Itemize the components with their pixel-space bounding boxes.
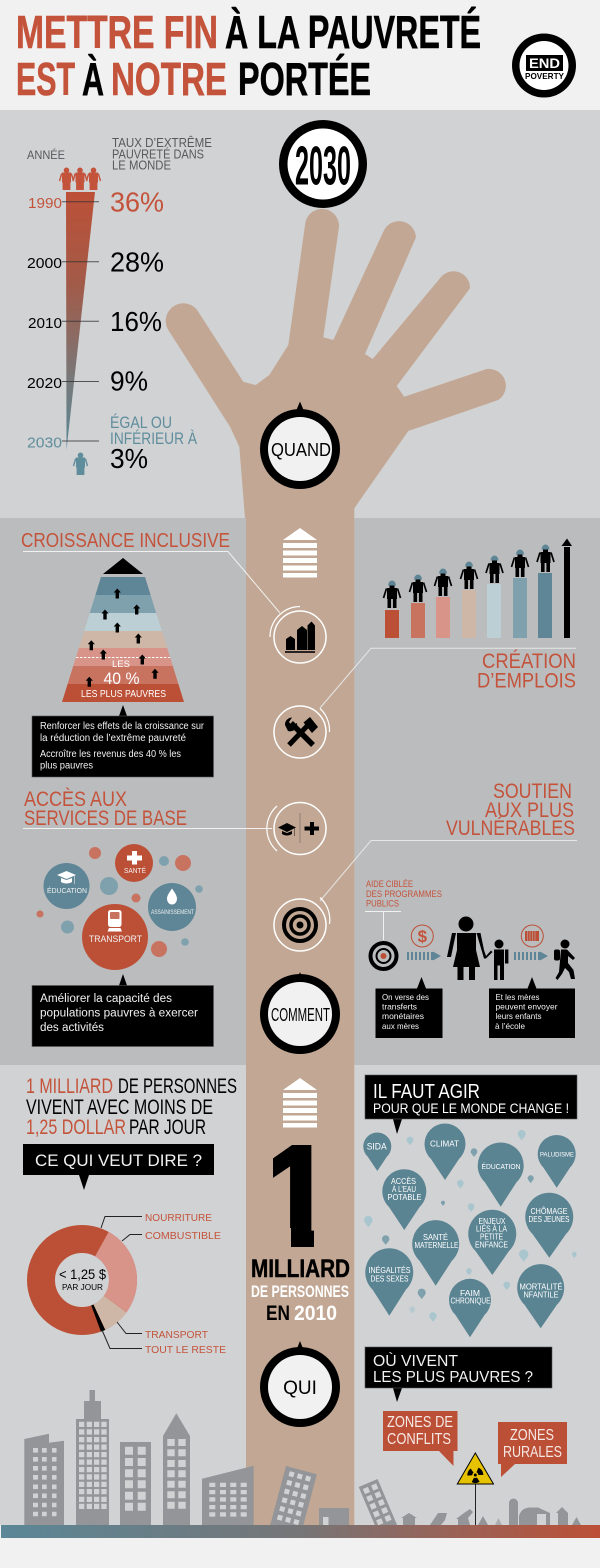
footer background [0,1538,600,1568]
leader line [23,552,280,613]
pin labels: PALUDISME [540,1152,575,1159]
callout: transfers: On verse des [382,992,429,1002]
column heading: rate [112,135,212,172]
icon: growth bars [270,606,326,663]
logo: end poverty: END [529,55,560,71]
callout [365,1347,552,1402]
heading [477,650,576,692]
headline: DE PERSONNES [118,1075,237,1098]
percent values [110,186,164,474]
section: basic services [23,788,272,1046]
target note: INFÉRIEUR À [110,429,197,448]
badge: comment: COMMENT [271,1005,330,1025]
bubble: education: ÉDUCATION [47,886,87,895]
icon: target [274,898,330,951]
callout: transfers [376,977,442,1038]
badge: quand [260,402,340,489]
pyramid label: 40 % [104,669,140,688]
section: inclusive growth [21,530,280,777]
title: NOTRE [111,53,227,105]
small target [365,912,401,969]
heading: VULNÉRABLES [446,817,575,840]
building 7 tilted [358,1479,397,1525]
headline [26,1075,237,1139]
icon: education and health [267,802,326,854]
panel background: who [0,1065,600,1525]
badge: quand: QUAND [271,440,331,460]
section: where the poorest live [365,1347,567,1525]
pin labels: À L’EAU [392,1184,416,1194]
workers [384,544,554,608]
callout: school: peuvent envoyer [496,1002,558,1012]
pin labels: ACCÈS [391,1176,416,1186]
pin labels: MATERNELLE [414,1240,459,1250]
bubble: education [44,863,90,909]
donut labels: TOUT LE RESTE [145,1344,226,1356]
heading: CROISSANCE INCLUSIVE [21,530,230,552]
target note: ÉGAL OU [110,413,172,432]
label: targeted aid: PUBLICS [366,898,399,910]
donut centre label: PAR JOUR [62,1282,103,1292]
callout: school: Et les mères [496,992,540,1002]
icon: dollar: $ [418,927,428,946]
callout: transfers: monétaires [382,1011,424,1021]
big figure: one billion: 2010 [294,1302,337,1325]
label: targeted aid: AIDE CIBLÉE [366,879,413,890]
pin labels: CLIMAT [430,1139,459,1149]
headline: 1 MILLIARD [26,1075,113,1098]
title: À LA PAUVRETÉ [225,6,481,58]
icon: house stripes [283,1078,317,1128]
pyramid bands [62,577,184,702]
heading: SOUTIEN [493,780,572,803]
year labels: 2030 [27,436,62,452]
building 4 [163,1413,190,1525]
pyramid label: LES PLUS PAUVRES [81,688,166,700]
donut labels: TRANSPORT [145,1329,209,1341]
badge: comment [260,972,340,1054]
section: job creation [320,538,576,708]
pin labels: CHÔMAGE [530,1206,568,1216]
pin labels: POTABLE [388,1192,422,1202]
icon: house stripes [283,528,317,578]
declining wedge [66,192,95,450]
icon: tools [274,706,330,758]
headline: VIVENT AVEC MOINS DE [26,1096,213,1119]
pyramid cap [103,558,143,574]
raised hand and arm [166,209,506,1525]
callout: populations pauvres à exercer [40,1008,198,1020]
small building [319,1508,349,1525]
pyramid label [81,659,166,700]
icon: books [521,925,543,947]
column heading: rate: LE MONDE [112,158,171,172]
donut labels: NOURRITURE [145,1212,212,1224]
headline: PAR JOUR [129,1116,206,1139]
building 6 tilted [270,1466,317,1525]
heading [24,788,187,830]
pin labels: INÉGALITÉS [368,1265,411,1275]
callout: what it means [23,1144,214,1190]
logo: end poverty [512,34,576,98]
percent values: 28% [110,246,164,278]
callout: LES PLUS PAUVRES ? [373,1369,533,1386]
icon: mother [447,916,492,980]
leader line [23,828,272,830]
callout: OÙ VIVENT [373,1351,458,1370]
badge: qui: QUI [283,1378,317,1399]
pin labels: ÉDUCATION [482,1162,520,1171]
panel background: when [0,110,600,518]
label: rural zones: RURALES [503,1444,562,1461]
label: rural zones [498,1422,567,1477]
small drops [364,1130,577,1322]
year labels: 2010 [28,316,62,332]
callout: Accroître les revenus des 40 % les [40,749,181,760]
decorative bubbles [36,847,203,957]
year labels [27,196,62,452]
poverty rate timeline [27,135,212,474]
callout: what it means: CE QUI VEUT DIRE ? [35,1152,202,1170]
header background [0,0,600,110]
leader line [320,648,576,708]
label: conflict zones: ZONES DE [387,1414,453,1431]
pin labels: DES SEXES [370,1274,409,1284]
leader line [320,840,577,901]
callout: la réduction de l’extrême pauvreté [40,733,186,744]
pin labels: SANTÉ [423,1232,448,1242]
badge: 2030 [279,120,367,208]
ground band [1,1525,600,1538]
title: METTRE FIN [16,6,218,58]
label: rural zones: ZONES [510,1427,554,1444]
growth arrows [86,588,159,687]
pin labels: DES JEUNES [528,1214,570,1224]
label: conflict zones: CONFLITS [387,1431,451,1448]
label: conflict zones [383,1411,458,1466]
pins [363,1124,576,1337]
building 2 [76,1390,109,1525]
panel background: how [0,518,600,1065]
pin labels: MORTALITÉ [520,1281,563,1291]
big figure: one billion: DE PERSONNES [251,1283,349,1301]
callout: school [489,977,575,1038]
callout: school: à l’école [495,1021,525,1031]
donut centre label: < 1,25 $ [59,1266,106,1282]
title: PORTÉE [238,53,371,105]
leader lines [101,1216,142,1348]
big figure: one billion: 1 [260,1115,335,1278]
pin labels: SIDA [367,1142,387,1152]
column heading: year: ANNÉE [27,147,65,162]
title: À [82,53,104,105]
heading [446,780,575,840]
callout: Améliorer la capacité des [40,993,172,1005]
bubble: health [115,844,153,882]
label: targeted aid: DES PROGRAMMES [366,889,442,900]
section: one billion spending [23,1075,237,1356]
icon: walking child [554,940,575,980]
title: EST [16,53,75,105]
column heading: rate: TAUX D’EXTRÊME [112,135,212,150]
logo: end poverty: POVERTY [525,71,564,81]
year labels: 2020 [27,376,62,392]
building 5 [202,1466,254,1525]
arrow: to school [514,952,548,960]
donut labels: COMBUSTIBLE [145,1230,221,1242]
building 1 [24,1434,64,1525]
icon: one person [74,453,88,474]
bubble: sanitation [148,883,196,931]
callout: Renforcer les effets de la croissance sur [40,721,205,732]
column heading: rate: PAUVRETÉ DANS [112,146,204,162]
pin labels: ENFANCE [475,1239,508,1249]
arrow: transfer [407,952,441,960]
bubble: transport: TRANSPORT [89,934,142,945]
badge: qui [260,1341,340,1427]
callout: des activités [40,1022,104,1034]
heading: ACCÈS AUX [24,788,127,811]
bubble: transport [82,904,148,970]
label: targeted aid [366,879,442,910]
heading: CRÉATION [482,650,576,673]
tick lines [62,202,99,441]
callout: school: leurs enfants [496,1011,542,1021]
callout [32,705,214,777]
callout: plus pauvres [40,760,93,772]
callout [365,1075,577,1134]
city skyline [24,1390,581,1525]
pin labels: FAIM [460,1288,480,1298]
pin labels: LIÉS À LA [476,1224,507,1234]
badge: 2030: 2030 [295,134,351,196]
pin labels [367,1139,575,1306]
icon: radiation sign [457,1453,494,1525]
title [16,6,481,105]
pin labels: ENJEUX [478,1216,506,1226]
bubble: sanitation: ASSAINISSEMENT [151,910,194,916]
callout: transfers: aux mères [382,1021,419,1031]
section: support the vulnerable [320,780,577,1038]
icon: three people [60,168,100,190]
bubble: health: SANTÉ [124,866,146,875]
big figure: one billion [252,1145,350,1320]
callout: POUR QUE LE MONDE CHANGE ! [373,1101,569,1116]
building 3 [120,1442,151,1525]
year labels: 1990 [28,196,62,212]
headline: 1,25 DOLLAR [26,1116,126,1139]
year labels: 2000 [27,256,62,272]
heading: D’EMPLOIS [477,670,576,692]
callout: IL FAUT AGIR [373,1081,480,1103]
pin labels: CHRONIQUE [450,1296,491,1306]
percent values: 16% [110,306,162,337]
pin labels: NFANTILE [524,1289,559,1299]
donut labels [145,1212,226,1356]
pyramid label: LES [112,659,130,670]
big figure: one billion: EN [266,1302,290,1325]
icon: dollar [411,925,433,947]
percent values: 36% [110,186,164,218]
big figure: one billion: MILLIARD [251,1255,350,1283]
heading: SERVICES DE BASE [24,807,187,830]
donut centre label [59,1266,106,1292]
bar chart [385,573,552,638]
heading: AUX PLUS [485,799,574,822]
village houses [401,1498,581,1525]
section: issues to act on [363,1075,577,1337]
pin labels: PETITE [480,1232,503,1242]
donut chart [25,1223,139,1337]
callout: transfers: transferts [382,1002,417,1012]
target note [110,413,197,448]
percent values: 9% [110,366,148,396]
icon: child [494,940,508,980]
percent values: 3% [110,443,148,474]
callout [32,974,214,1046]
arrow [562,538,572,638]
